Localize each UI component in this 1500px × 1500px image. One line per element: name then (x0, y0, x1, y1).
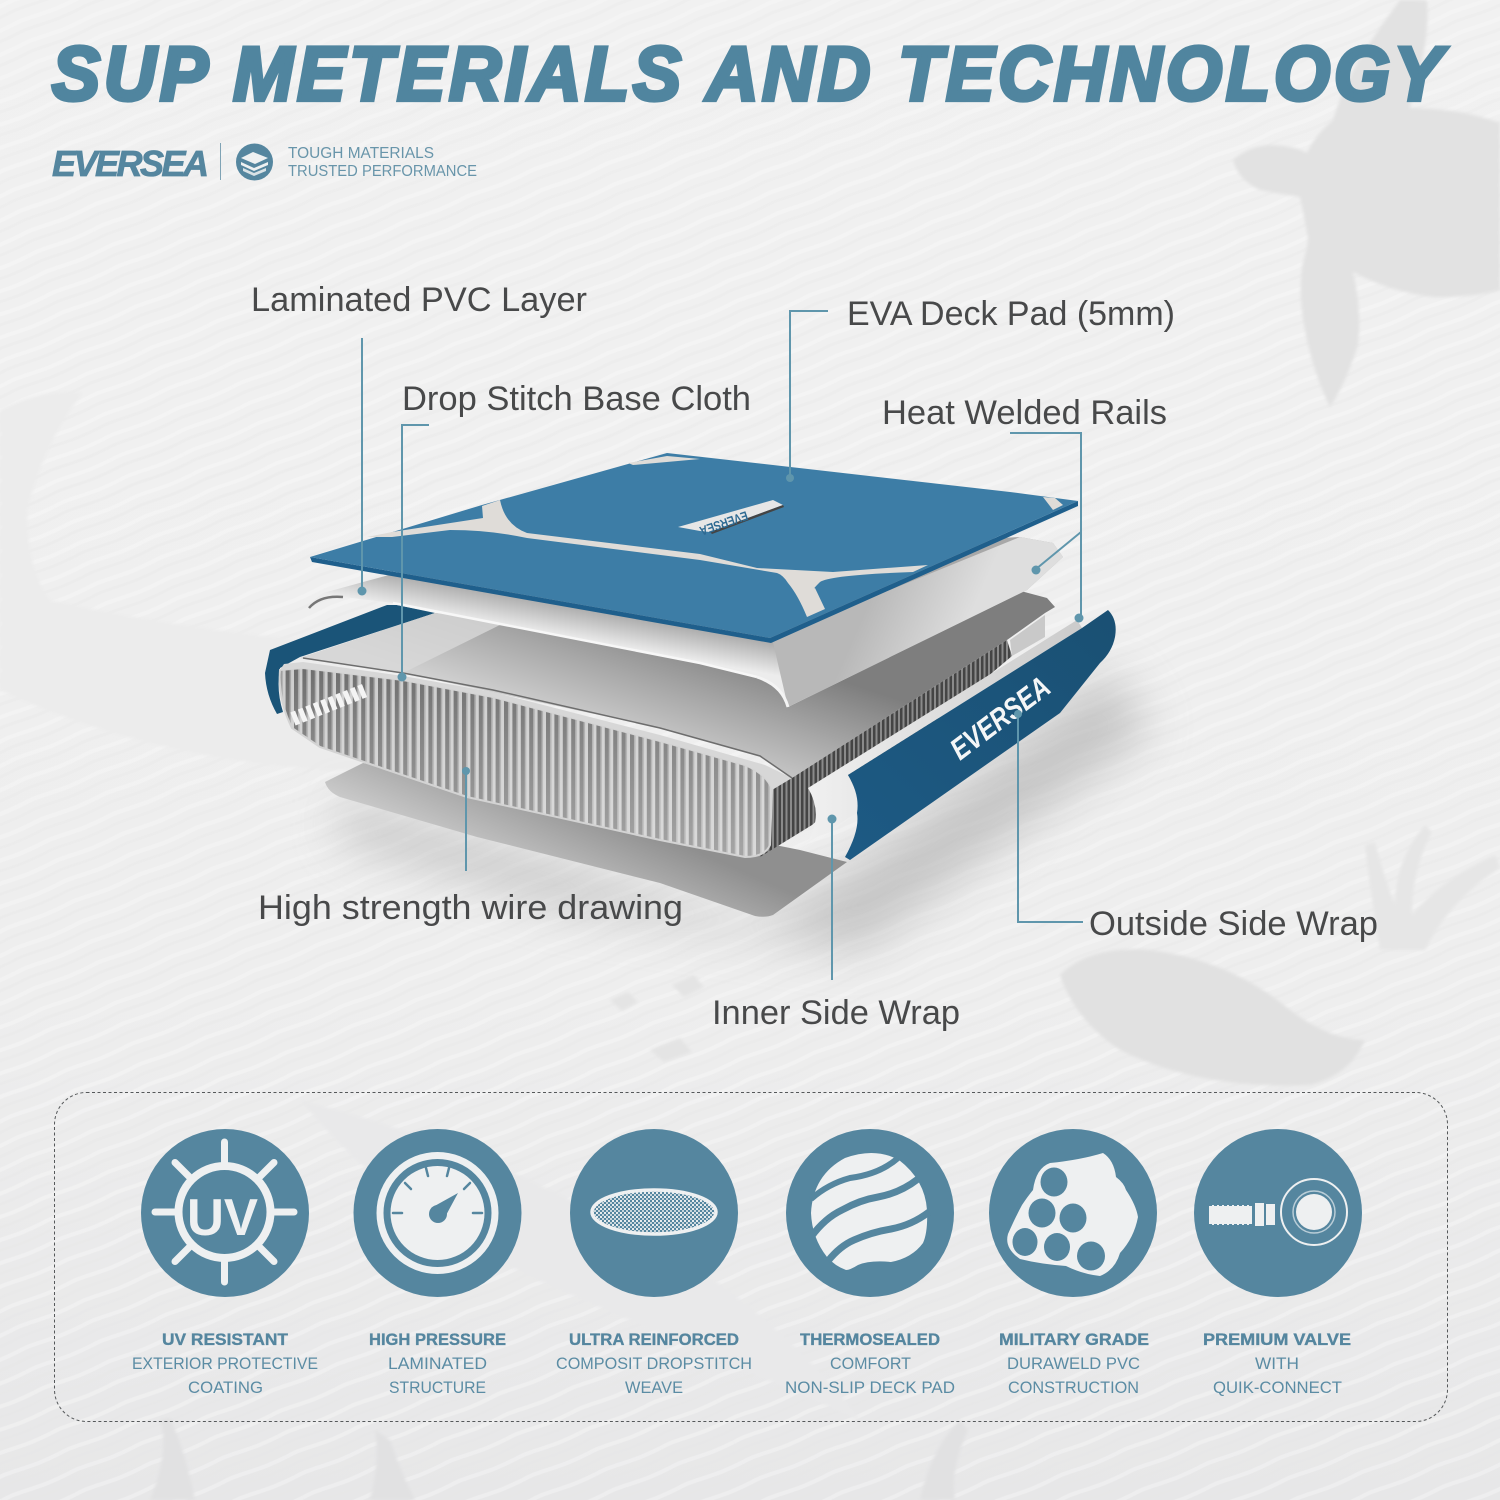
coral right (1365, 825, 1500, 950)
caption: NON-SLIP DECK PAD (785, 1378, 955, 1397)
light stitch patch at the back (1010, 615, 1045, 656)
bottom corals (150, 1418, 968, 1500)
feature: military grade (989, 1129, 1157, 1397)
EVERSEA logo on wrap: EVERSEA (944, 670, 1057, 767)
callout: Drop Stitch Base Cloth: Drop Stitch Base Cloth (402, 380, 751, 418)
feature: premium valve (1194, 1129, 1362, 1397)
large whale left (0, 392, 482, 770)
callout: High strength wire drawing (258, 767, 683, 927)
drop stitch top surface (300, 590, 1055, 778)
tagline: TOUGH MATERIALS (288, 145, 434, 162)
deck pad brand tag: EVERSEA (697, 508, 750, 539)
caption: WITH (1255, 1354, 1299, 1373)
feature: ultra reinforced (556, 1129, 752, 1397)
caption: UV RESISTANT (162, 1330, 289, 1349)
callout: Inner Side Wrap (712, 814, 960, 1032)
whale right (1060, 949, 1365, 1086)
deck pad white groove pattern (367, 500, 928, 617)
caption: ULTRA REINFORCED (569, 1330, 739, 1349)
icon: non-slip deck wave ball (786, 1129, 954, 1297)
brand logo and tagline (52, 143, 477, 184)
caption: WEAVE (625, 1378, 683, 1397)
callout: Laminated PVC Layer (251, 281, 587, 596)
callout: High strength wire drawing: High strength wire drawing (258, 889, 683, 927)
tagline (288, 145, 477, 180)
caption (556, 1330, 752, 1397)
laminated PVC layer (307, 537, 1063, 707)
caption (785, 1330, 955, 1397)
title: SUP METERIALS AND TECHNOLOGY (52, 31, 1448, 116)
caption: CONSTRUCTION (1008, 1378, 1139, 1397)
turtle (1233, 0, 1500, 407)
exploded SUP layer diagram (265, 453, 1150, 950)
caption: LAMINATED (388, 1354, 487, 1373)
logo: EVERSEA: EVERSEA (52, 143, 209, 184)
icon: duraweld PVC cross-section (989, 1129, 1157, 1297)
feature: high pressure (354, 1129, 522, 1397)
tagline: TRUSTED PERFORMANCE (288, 163, 477, 180)
caption: MILITARY GRADE (999, 1330, 1149, 1349)
caption: STRUCTURE (389, 1378, 486, 1397)
caption: DURAWELD PVC (1007, 1354, 1140, 1373)
EVA deck pad (310, 453, 1078, 643)
caption: HIGH PRESSURE (369, 1330, 506, 1349)
caption: EXTERIOR PROTECTIVE (132, 1354, 318, 1373)
icon: UV ship wheel: UV (187, 1189, 258, 1247)
caption: COATING (188, 1378, 263, 1397)
bottom PVC layer (325, 763, 847, 917)
caption: PREMIUM VALVE (1203, 1330, 1351, 1349)
icon: UV ship wheel (141, 1129, 309, 1297)
callout: Drop Stitch Base Cloth (398, 380, 751, 682)
caption (369, 1330, 506, 1397)
caption: QUIK-CONNECT (1213, 1378, 1342, 1397)
callout: Heat Welded Rails (882, 394, 1167, 622)
panel: features (54, 1092, 1448, 1422)
callout: Laminated PVC Layer: Laminated PVC Layer (251, 281, 587, 319)
outside side wrap (845, 610, 1116, 860)
caption (999, 1330, 1149, 1397)
icon: pressure gauge (354, 1129, 522, 1297)
white stitch band (293, 690, 366, 719)
deck pad brand tag (678, 500, 784, 539)
callout: Inner Side Wrap: Inner Side Wrap (712, 994, 960, 1032)
feature: thermosealed (785, 1129, 955, 1397)
inner side wrap (807, 620, 1082, 843)
caption: COMFORT (830, 1354, 911, 1373)
icon: valve (1194, 1129, 1362, 1297)
callout: Outside Side Wrap (1014, 710, 1378, 943)
callout: EVA Deck Pad (5mm) (786, 295, 1175, 482)
caption: COMPOSIT DROPSTITCH (556, 1354, 752, 1373)
caption (132, 1330, 318, 1397)
drop stitch wire front face (280, 668, 772, 857)
fishes (610, 975, 704, 1062)
caption: THERMOSEALED (800, 1330, 940, 1349)
callout: EVA Deck Pad (5mm): EVA Deck Pad (5mm) (847, 295, 1175, 333)
caption (1203, 1330, 1351, 1397)
icon: dropstitch weave (570, 1129, 738, 1297)
callout: Heat Welded Rails: Heat Welded Rails (882, 394, 1167, 432)
callout: Outside Side Wrap: Outside Side Wrap (1089, 905, 1378, 943)
icon: stacked layers badge (236, 144, 273, 180)
base cloth rim (280, 662, 792, 790)
soft shadow (340, 670, 1150, 950)
dark side wire drawing (760, 640, 1012, 857)
outer left side wrap (265, 605, 435, 714)
feature: UV resistant (132, 1129, 318, 1397)
